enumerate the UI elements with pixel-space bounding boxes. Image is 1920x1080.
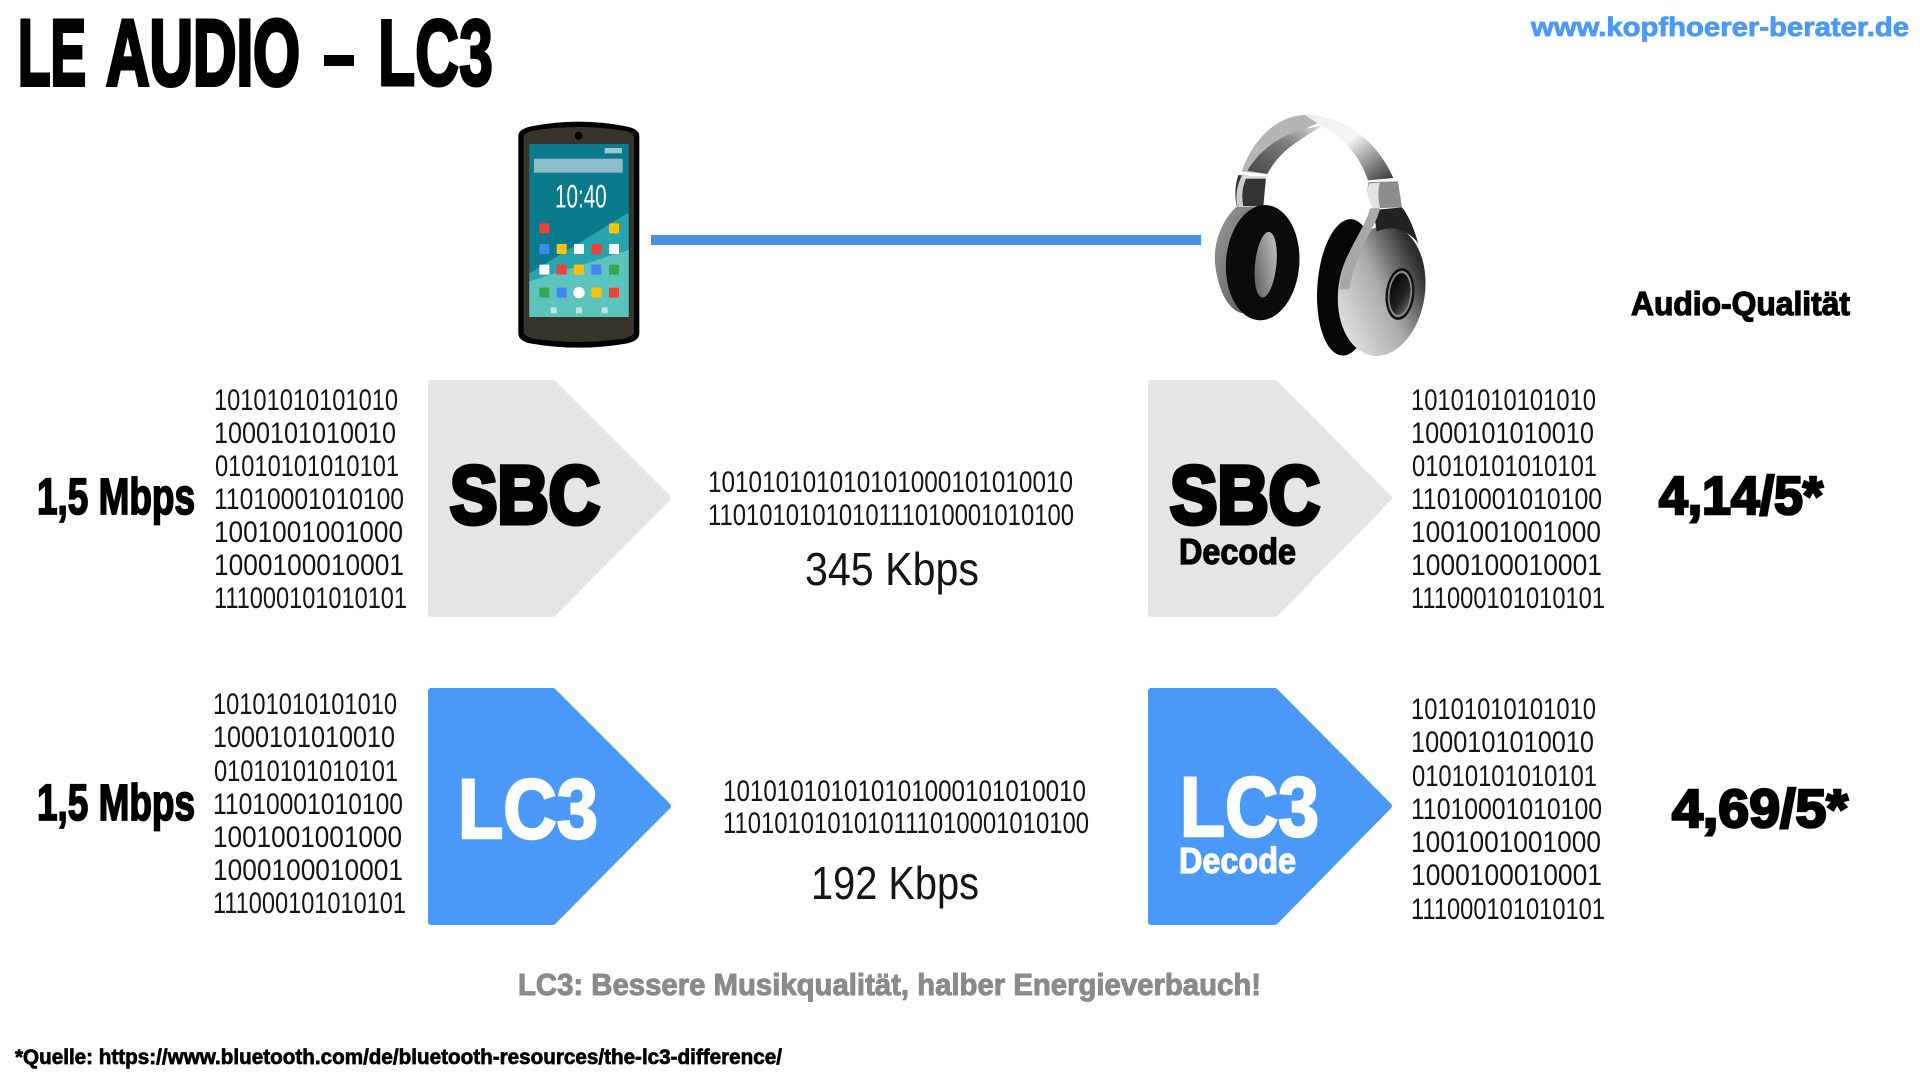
input bits [213,688,406,920]
input bits: 01010101010101 [214,755,398,788]
LC3 encoder arrow [431,691,668,922]
title: AUDIO [106,0,300,105]
SBC decoder arrow [1151,383,1389,614]
transmitted bits: 1101010101010111010001010100 [708,499,1074,532]
transmitted bits [708,466,1074,532]
input bits: 111000101010101 [214,582,407,615]
input bits: 1000101010010 [214,417,396,450]
output bits [1411,384,1605,615]
transmitted bits [723,775,1089,840]
SBC decoder arrow: Decode [1179,531,1296,572]
output bits: 111000101010101 [1411,582,1605,615]
LC3 encoder arrow: LC3 [458,762,598,856]
LC3 decoder arrow [1151,691,1389,922]
output bits: 1000100010001 [1411,549,1602,582]
input bitrate: 1,5 Mbps [37,468,195,525]
LC3 decoder arrow: LC3 [1180,760,1319,854]
input bits [214,384,407,615]
input bits: 10101010101010 [214,384,398,417]
input bits: 10101010101010 [213,688,397,721]
input bits: 1000101010010 [213,721,395,754]
output bits: 1001001001000 [1411,516,1601,549]
output bits: 1001001001000 [1411,826,1601,859]
transmitted bitrate: 192 Kbps [811,857,979,909]
clock: 10:40 [555,178,607,214]
input bits: 111000101010101 [213,887,406,920]
source footnote: *Quelle: https://www.bluetooth.com/de/bluetooth-resources/the-lc3-difference/ [15,1046,782,1069]
website url: www.kopfhoerer-berater.de [1530,12,1909,42]
transmitted bitrate: 345 Kbps [805,543,979,595]
icon: smartphone [518,122,639,348]
heading: audio quality: Audio-Qualität [1631,285,1850,322]
row: LC3 [37,688,1848,926]
input bits: 1001001001000 [213,821,402,854]
output bits: 11010001010100 [1411,483,1602,516]
transmitted bits: 101010101010101000101010010 [723,775,1086,808]
input bits: 1000100010001 [214,549,404,582]
connection line [651,235,1201,245]
summary text: LC3: Bessere Musikqualität, halber Energieverbauch! [518,967,1261,1002]
output bits: 1000101010010 [1411,417,1594,450]
output bits: 1000101010010 [1411,726,1594,759]
output bits [1411,693,1605,926]
output bits: 01010101010101 [1412,450,1597,483]
input bits: 11010001010100 [213,788,403,821]
SBC encoder arrow [431,383,668,614]
transmitted bits: 1101010101010111010001010100 [723,807,1089,840]
title: LC3 [378,0,493,105]
output bits: 10101010101010 [1411,693,1596,726]
input bits: 01010101010101 [215,450,399,483]
icon: headphones [1215,115,1434,362]
title [18,0,493,105]
output bits: 10101010101010 [1411,384,1596,417]
input bitrate: 1,5 Mbps [37,774,195,831]
input bits: 11010001010100 [214,483,404,516]
output bits: 1000100010001 [1411,859,1602,892]
input bits: 1001001001000 [214,516,403,549]
output bits: 01010101010101 [1412,760,1597,793]
row: SBC [37,383,1823,615]
output bits: 11010001010100 [1411,793,1602,826]
SBC quality score: 4,14/5* [1659,466,1823,526]
SBC decoder arrow: SBC [1170,450,1320,541]
transmitted bits: 101010101010101000101010010 [708,466,1073,499]
LC3 decoder arrow: Decode [1179,840,1296,881]
title: LE [18,0,86,105]
SBC encoder arrow: SBC [450,450,600,541]
input bits: 1000100010001 [213,854,403,887]
output bits: 111000101010101 [1411,893,1605,926]
LC3 quality score: 4,69/5* [1672,779,1848,839]
